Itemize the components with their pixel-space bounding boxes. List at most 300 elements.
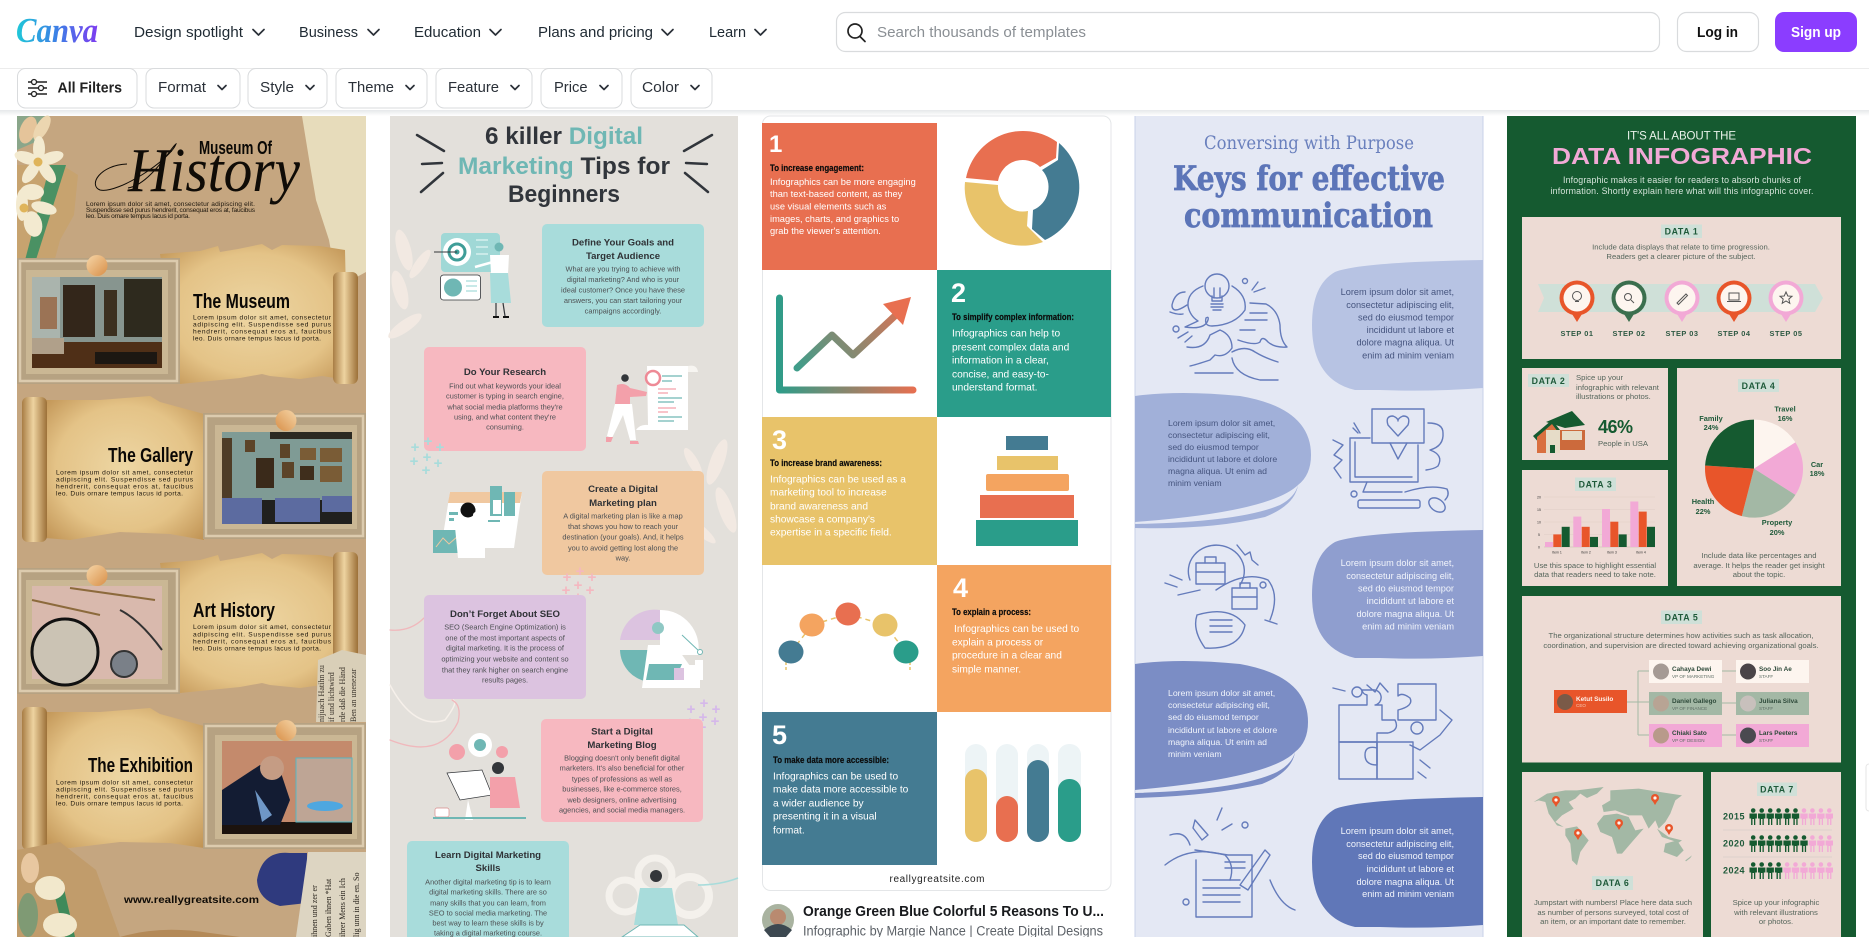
blob 2: consectetur adipiscing elit, [1168, 430, 1270, 440]
plus marks: pink: + [574, 589, 583, 606]
blob 5: incididunt ut labore et [1367, 864, 1454, 874]
nav menu items: Business [299, 24, 358, 41]
card: create a marketing plan: that shows you how to reach your [568, 522, 679, 531]
card: do your research: what social media platforms they're [446, 402, 563, 412]
plus marks: teal [410, 433, 445, 479]
plus marks: lilac [686, 695, 721, 736]
section: the gallery: The Gallery [108, 445, 194, 467]
org chart connectors [1627, 671, 1736, 735]
decorative leaves [385, 228, 741, 547]
section: the museum: adipiscing elit. Suspendisse sed purus [193, 322, 332, 328]
nav menu items: Design spotlight [134, 24, 244, 41]
blob 2: magna aliqua. Ut enim ad [1168, 466, 1267, 476]
card: don't forget seo [424, 595, 586, 699]
card: data 4 pie chart: Travel [1774, 404, 1796, 414]
blob 5 [1312, 797, 1483, 928]
card: data 1 steps: STEP 05 [1770, 329, 1802, 338]
bar chart: Item 1 [1552, 550, 1562, 554]
card: data 2 [1522, 368, 1668, 460]
block 3: brand awareness: brand awareness and [770, 502, 868, 512]
card: do your research: Do Your Research [464, 367, 546, 378]
section: art history: hendrerit, consequat eros at, faucibus [193, 638, 332, 646]
sign up button [1775, 12, 1857, 52]
section: the museum [17, 244, 358, 384]
card: data 1 steps: STEP 04 [1718, 329, 1751, 338]
chart: progress bars [965, 744, 1081, 842]
staff boxes: VP OF DESIGN [1672, 738, 1705, 743]
search box: Search thousands of templates [877, 25, 1086, 41]
blob 1: sed do eiusmod tempor [1358, 312, 1454, 322]
section: the exhibition: Lorem ipsum dolor sit amet, consectetur [56, 780, 194, 786]
card: data 3 bar chart: Use this space to highlight essential [1534, 561, 1656, 570]
panel: 5 reasons infographic [762, 116, 1111, 890]
card: data 4 pie chart: average. It helps the reader get insight [1693, 561, 1825, 570]
illustration: target presentation [434, 233, 511, 318]
bottom collage [17, 842, 366, 937]
card: data 4 pie chart: Property [1762, 518, 1793, 527]
card: create a marketing plan: you to avoid getting lost along the [568, 544, 678, 552]
format filter [146, 68, 240, 108]
block 5: accessible data [762, 712, 937, 865]
block 1: engagement: Infographics can be more engaging [770, 177, 916, 187]
card: define your goals: digital marketing? And who is your [567, 275, 680, 284]
title: Museum Of [199, 138, 273, 158]
section: the gallery: adipiscing elit. Suspendisse sed purus [56, 476, 194, 484]
step pins [1560, 280, 1804, 322]
illustration: arc of circles [778, 602, 918, 671]
all filters button [18, 68, 137, 108]
card: define your goals: Define Your Goals and [572, 238, 674, 248]
header: IT'S ALL ABOUT THE [1627, 130, 1736, 142]
blob 5: consectetur adipiscing elit, [1346, 839, 1454, 849]
card: data 4 pie chart: Include data like percentages and [1702, 551, 1816, 560]
card: do your research: Find out what keywords your ideal [449, 382, 561, 390]
blob 2: sed do eiusmod tempor [1168, 442, 1259, 452]
theme filter [336, 68, 427, 108]
blob 3: incididunt ut labore et [1367, 596, 1454, 606]
section: the museum: Lorem ipsum dolor sit amet, consectetur [193, 314, 332, 322]
block 1: engagement: To increase engagement: [770, 163, 864, 173]
staff boxes: STAFF [1759, 706, 1773, 711]
icon: lightbulb and hands [1170, 274, 1287, 380]
bar chart: 20 [1537, 496, 1541, 500]
ceo box: Ketut Susilo [1576, 696, 1613, 703]
section: the exhibition [22, 707, 366, 850]
log in button [1678, 12, 1758, 52]
block 1: engagement: 1 [769, 131, 782, 158]
block 5: accessible data: To make data more accessible: [773, 755, 889, 765]
title: 6 killer Digital [485, 123, 643, 150]
card: data 3 bar chart: DATA 3 [1579, 480, 1612, 490]
author avatar [762, 904, 794, 937]
plus marks: lilac: + [699, 709, 708, 726]
plus marks: lilac: + [700, 695, 709, 712]
card: define your goals: answers, you can start tailoring your [564, 296, 683, 305]
illustration: blogger at computer [433, 733, 526, 820]
title burst strokes [417, 135, 712, 192]
icon: computer and heart [1333, 409, 1448, 515]
search box [836, 12, 1660, 52]
website url: www.reallygreatsite.com [123, 894, 259, 906]
card: data 2: 46% [1598, 417, 1633, 437]
section: the gallery: hendrerit, consequat eros at, faucibus [56, 484, 194, 490]
blob 5: sed do eiusmod tempor [1358, 851, 1454, 861]
blob 4: magna aliqua. Ut enim ad [1168, 737, 1267, 747]
card: define your goals: ideal customer? Once you have these [561, 286, 685, 294]
card: data 7 pictogram: 2020 [1723, 838, 1745, 848]
icon: speech bubbles and briefcases [1165, 545, 1277, 648]
chart: rising arrow [780, 297, 913, 390]
bottom collage: ihrer Mens ein Ich [338, 878, 347, 937]
filter bar [0, 68, 1869, 116]
card: data 6 world map: an item, or an important date to remember. [1540, 917, 1686, 926]
card: start a marketing blog: marketers. It's also beneficial for other [560, 764, 685, 772]
card: create a marketing plan [542, 471, 704, 575]
card: data 4 pie chart: DATA 4 [1742, 381, 1775, 391]
edge widget [1866, 764, 1869, 811]
card: learn digital marketing skills: digital marketing skills. There are so [429, 888, 547, 896]
card: data 2: illustrations or photos. [1576, 392, 1651, 401]
card: data 6 world map: as number of persons surveyed, total cost of [1537, 908, 1689, 917]
bottom collage: lig unn in die en. So [352, 873, 361, 937]
section: the gallery: Lorem ipsum dolor sit amet, consectetur [56, 470, 194, 476]
bar chart: 15 [1537, 508, 1541, 512]
block 1: engagement: images, charts, and graphics to [770, 214, 899, 224]
staff boxes: Daniel Gallego [1672, 698, 1716, 705]
plus marks: teal: + [411, 439, 420, 456]
plus marks: teal: + [410, 453, 419, 470]
plus marks: lilac: + [698, 719, 707, 736]
heading: communication [1184, 196, 1433, 236]
feature filter: Feature [448, 79, 499, 96]
card: start a marketing blog: Marketing Blog [587, 740, 657, 751]
section: art history: Lorem ipsum dolor sit amet, consectetur [193, 624, 332, 631]
block 1: engagement: than text-based content, as they [770, 189, 903, 199]
sign up button: Sign up [1791, 24, 1841, 41]
top right torn paper [302, 116, 366, 284]
bar chart: 5 [1538, 533, 1540, 537]
block 4: explain a process: To explain a process: [952, 607, 1031, 617]
decorative curves [390, 618, 459, 747]
bar chart: Item 3 [1607, 550, 1617, 554]
section: the exhibition: adipiscing elit. Suspendisse sed purus [56, 786, 194, 794]
section: art history: adipiscing elit. Suspendisse sed purus [193, 632, 332, 638]
card: data 6 world map: DATA 6 [1596, 878, 1629, 888]
block 2: complex information: concise, and easy-to- [952, 370, 1049, 380]
plus marks: teal: + [424, 433, 433, 450]
card: start a marketing blog: types of professions as well as [572, 774, 672, 784]
card: data 4 pie chart: Car [1811, 460, 1823, 469]
style filter [248, 68, 327, 108]
plus marks: teal: + [434, 455, 443, 472]
card: data 2: People in USA [1598, 439, 1649, 448]
top navigation bar [0, 0, 1869, 69]
card: define your goals: Target Audience [586, 251, 660, 262]
block 3: brand awareness: expertise in a specific field. [770, 528, 892, 538]
pictogram rows [1750, 808, 1833, 879]
section: the exhibition: leo. Duis ornare tempus lacus id porta. [56, 800, 183, 808]
card: data 5 org chart: DATA 5 [1665, 612, 1698, 622]
block 5: accessible data: make data more accessible to [773, 784, 909, 796]
photo: museum room [32, 277, 162, 368]
block 2: complex information: To simplify complex information: [952, 312, 1074, 322]
illustration: stacked layers [976, 436, 1078, 546]
photo: man at glass case [222, 741, 352, 834]
block 4: explain a process [937, 565, 1111, 712]
footer url: reallygreatsite.com [890, 874, 984, 885]
all filters button: All Filters [58, 80, 122, 96]
block 5: accessible data: a wider audience by [773, 798, 865, 810]
icon: house [1533, 411, 1585, 453]
panel: museum of history [13, 113, 366, 937]
section: the museum: The Museum [193, 291, 290, 313]
nav menu items: Learn [709, 24, 746, 41]
plus marks: pink: + [588, 569, 597, 586]
plus marks: lilac: + [687, 701, 696, 718]
card: data 1 steps: STEP 01 [1561, 329, 1593, 338]
block 4: explain a process: simple manner. [952, 664, 1021, 676]
blob 4: incididunt ut labore et dolore [1168, 725, 1277, 735]
feature filter [436, 68, 532, 108]
card: data 6 world map: Jumpstart with numbers! Place here data such [1534, 898, 1692, 907]
card: start a marketing blog: Blogging doesn't only benefit digital [564, 754, 680, 762]
card: data 4 pie chart: Health [1692, 497, 1715, 506]
card: data 2: Spice up your [1576, 373, 1623, 382]
card: data 4 pie chart: 16% [1778, 414, 1793, 423]
illustration: planner at chart board [433, 486, 522, 558]
card: don't forget seo: SEO (Search Engine Optimization) is [444, 622, 566, 632]
card: data 1 steps: DATA 1 [1665, 226, 1698, 236]
bottom collage: Gaben ihnen *Hat [324, 878, 333, 937]
newspaper scrap: rde daß die Händ [338, 667, 347, 722]
blob 3: consectetur adipiscing elit, [1346, 571, 1454, 581]
staff boxes: STAFF [1759, 674, 1773, 679]
price filter [541, 68, 622, 108]
block 2: complex information: 2 [951, 278, 966, 308]
card: data 1 steps: Readers get a clearer picture of the subject. [1606, 252, 1756, 261]
staff boxes: Lars Peeters [1759, 730, 1798, 737]
card: data 2: DATA 2 [1532, 376, 1565, 386]
newspaper scrap: if und lichtwird [327, 672, 336, 722]
plus marks: pink [562, 563, 597, 606]
plus marks: pink: + [562, 582, 571, 599]
intro text: Suspendisse sed purus hendrerit, consequat eros at, faucibus [86, 207, 256, 214]
card: data 4 pie chart: 22% [1696, 507, 1711, 516]
blob 5: dolore magna aliqua. Ut [1356, 877, 1454, 887]
block 2: complex information: understand format. [952, 382, 1038, 394]
top left flowers [13, 113, 78, 270]
block 5: accessible data: presenting it in a visual [773, 812, 877, 822]
panel: keys for effective communication [1135, 116, 1483, 937]
blob 3: Lorem ipsum dolor sit amet, [1341, 558, 1454, 568]
plus marks: pink: + [563, 569, 572, 586]
card: learn digital marketing skills: SEO to social media marketing. The [429, 908, 547, 918]
card: don't forget seo: digital marketing. It is the process of [446, 644, 565, 652]
heading [1173, 159, 1445, 236]
section: the exhibition: The Exhibition [88, 755, 193, 777]
card: don't forget seo: that they rank higher on search engine [442, 666, 568, 674]
block 3: brand awareness [762, 417, 937, 565]
card: data 4 pie chart: Family [1699, 414, 1724, 423]
section: the gallery: leo. Duis ornare tempus lacus id porta. [56, 490, 183, 498]
blob 4 [1135, 661, 1308, 798]
blob 2 [1135, 393, 1311, 528]
card: data 7 pictogram: with relevant illustrations [1733, 908, 1818, 917]
bar chart: 0 [1538, 546, 1540, 550]
section: art history [17, 552, 358, 694]
template caption: Orange Green Blue Colorful 5 Reasons To U... [803, 903, 1104, 920]
section: art history: Art History [193, 600, 276, 622]
blob 4: consectetur adipiscing elit, [1168, 700, 1270, 710]
newspaper scrap: Ben an unenezar [349, 668, 358, 722]
blob 1: enim ad minim veniam [1362, 350, 1454, 360]
staff boxes: VP OF FINANCE [1672, 706, 1707, 711]
card: data 4 pie chart: about the topic. [1733, 570, 1785, 579]
block 5: accessible data: Infographics can be used to [773, 772, 898, 782]
card: start a marketing blog: businesses, like e-commerce stores, [562, 784, 682, 794]
card: data 4 pie chart [1677, 368, 1841, 586]
card: data 7 pictogram: 2024 [1723, 866, 1745, 876]
block 1: engagement: use visual elements such as [770, 202, 887, 212]
block 2: complex information: present complex data and [952, 342, 1070, 354]
card: do your research: using, and what content they're [454, 412, 556, 422]
blob 1 [1312, 260, 1483, 391]
blob 3: dolore magna aliqua. Ut [1356, 609, 1454, 619]
plus marks: lilac: + [686, 714, 695, 731]
bar chart: Item 2 [1581, 550, 1591, 554]
section: the museum: hendrerit, consequat eros at, faucibus [193, 328, 332, 336]
card: don't forget seo: one of the most important aspects of [445, 634, 566, 642]
illustration: analyst with laptop [620, 610, 703, 688]
blob 1: consectetur adipiscing elit, [1346, 300, 1454, 310]
title: Beginners [508, 181, 620, 208]
header [1550, 130, 1814, 196]
blob 2: Lorem ipsum dolor sit amet, [1168, 418, 1275, 428]
block 2: complex information [937, 270, 1111, 417]
template caption [762, 903, 1104, 937]
card: data 1 steps [1522, 217, 1841, 359]
card: data 2: infographic with relevant [1576, 383, 1660, 392]
block 4: explain a process: procedure in a clear and [952, 650, 1062, 662]
bar chart [1537, 496, 1655, 554]
staff boxes: Juliana Silva [1759, 698, 1798, 705]
section: the exhibition: hendrerit, consequat eros at, faucibus [56, 794, 194, 800]
card: don't forget seo: results pages. [482, 676, 528, 684]
card: data 1 steps: STEP 02 [1613, 329, 1645, 338]
card: data 5 org chart [1522, 596, 1841, 762]
header: DATA INFOGRAPHIC [1552, 143, 1812, 169]
card: data 1 steps: Include data displays that relate to time progression. [1592, 242, 1770, 252]
newspaper scrap: nijuach Hatihn zu [317, 665, 326, 722]
block 2: complex information: information in a clear, [952, 356, 1049, 366]
format filter: Format [158, 79, 207, 96]
blob 4: sed do eiusmod tempor [1168, 712, 1259, 722]
card: data 7 pictogram: DATA 7 [1760, 784, 1794, 794]
nav menu items: Plans and pricing [538, 24, 653, 41]
staff boxes: Chiaki Sato [1672, 730, 1707, 737]
plus marks: pink: + [576, 563, 585, 580]
card: data 4 pie chart: 24% [1704, 423, 1719, 432]
card: data 7 pictogram: or photos. [1759, 917, 1793, 926]
card: learn digital marketing skills [407, 841, 569, 937]
card: define your goals: campaigns accordingly. [585, 306, 661, 316]
block 4: explain a process: explain a process or [952, 638, 1044, 648]
color filter: Color [642, 79, 679, 96]
card: start a marketing blog [541, 719, 703, 822]
price filter: Price [554, 79, 588, 96]
icon: writing hand and document [1165, 808, 1295, 917]
block 1: engagement [762, 123, 937, 270]
card: data 7 pictogram [1711, 772, 1841, 937]
chart: segmented donut [965, 131, 1079, 246]
blob 3: sed do eiusmod tempor [1358, 584, 1454, 594]
panel: data infographic [1507, 116, 1856, 937]
section: the museum: leo. Duis ornare tempus lacus id porta. [193, 336, 321, 342]
card: data 6 world map [1522, 772, 1703, 937]
newspaper scrap [316, 650, 366, 722]
block 4: explain a process: 4 [953, 573, 968, 603]
plus marks: teal: + [422, 462, 431, 479]
illustration: teacher with gears [609, 858, 738, 937]
card: data 3 bar chart [1522, 470, 1668, 586]
block 4: explain a process: Infographics can be used to [954, 624, 1079, 635]
block 5: accessible data: 5 [772, 720, 787, 750]
header: Infographic makes it easier for readers to absorb chunks of [1563, 175, 1802, 185]
blob 5: Lorem ipsum dolor sit amet, [1341, 826, 1454, 836]
card: define your goals: What are you trying to achieve with [565, 264, 681, 274]
blob 2: minim veniam [1168, 478, 1222, 488]
card: create a marketing plan: Create a Digital [588, 484, 658, 495]
nav menu items: Education [414, 24, 481, 41]
card: learn digital marketing skills: Learn Digital Marketing [435, 850, 541, 861]
bar chart: 10 [1537, 520, 1541, 524]
block 5: accessible data: format. [773, 826, 805, 836]
block 3: brand awareness: Infographics can be used as a [770, 474, 906, 486]
title [458, 123, 670, 208]
plus marks: lilac: + [711, 713, 720, 730]
blob 3 [1312, 530, 1483, 659]
heading: Keys for effective [1173, 159, 1445, 199]
card: start a marketing blog: Start a Digital [591, 726, 653, 738]
plus marks: pink: + [574, 577, 583, 594]
icon: puzzle pieces [1333, 683, 1452, 779]
subtitle: Conversing with Purpose [1204, 132, 1414, 154]
theme filter: Theme [348, 79, 394, 96]
card: start a marketing blog: web designers, online advertising [566, 796, 677, 804]
card: learn digital marketing skills: Skills [475, 863, 501, 874]
card: learn digital marketing skills: many skills that you can learn, from [430, 898, 546, 908]
card: create a marketing plan: way. [615, 554, 630, 562]
log in button: Log in [1697, 24, 1738, 41]
card: define your goals [542, 224, 704, 327]
section: the gallery [22, 396, 366, 542]
intro text: leo. Duis ornare tempus lacus id porta. [86, 213, 190, 220]
card: do your research: consuming. [486, 422, 524, 432]
card: data 7 pictogram: Spice up your infographic [1733, 898, 1820, 907]
blob 2: incididunt ut labore et dolore [1168, 454, 1277, 464]
section: art history: leo. Duis ornare tempus lacus id porta. [193, 646, 321, 652]
block 3: brand awareness: marketing tool to increase [770, 488, 887, 498]
ribbon [1538, 284, 1823, 312]
card: do your research [424, 347, 586, 451]
bar chart: Item 4 [1636, 550, 1646, 554]
card: do your research: customer is typing in search engine, [446, 392, 564, 400]
ceo box: CEO [1576, 703, 1586, 708]
card: create a marketing plan: destination (your goals). And, it helps [562, 532, 684, 542]
logo: Canva: Canva [16, 11, 98, 50]
blob 3: enim ad minim veniam [1362, 622, 1454, 632]
card: data 1 steps: STEP 03 [1666, 329, 1698, 338]
